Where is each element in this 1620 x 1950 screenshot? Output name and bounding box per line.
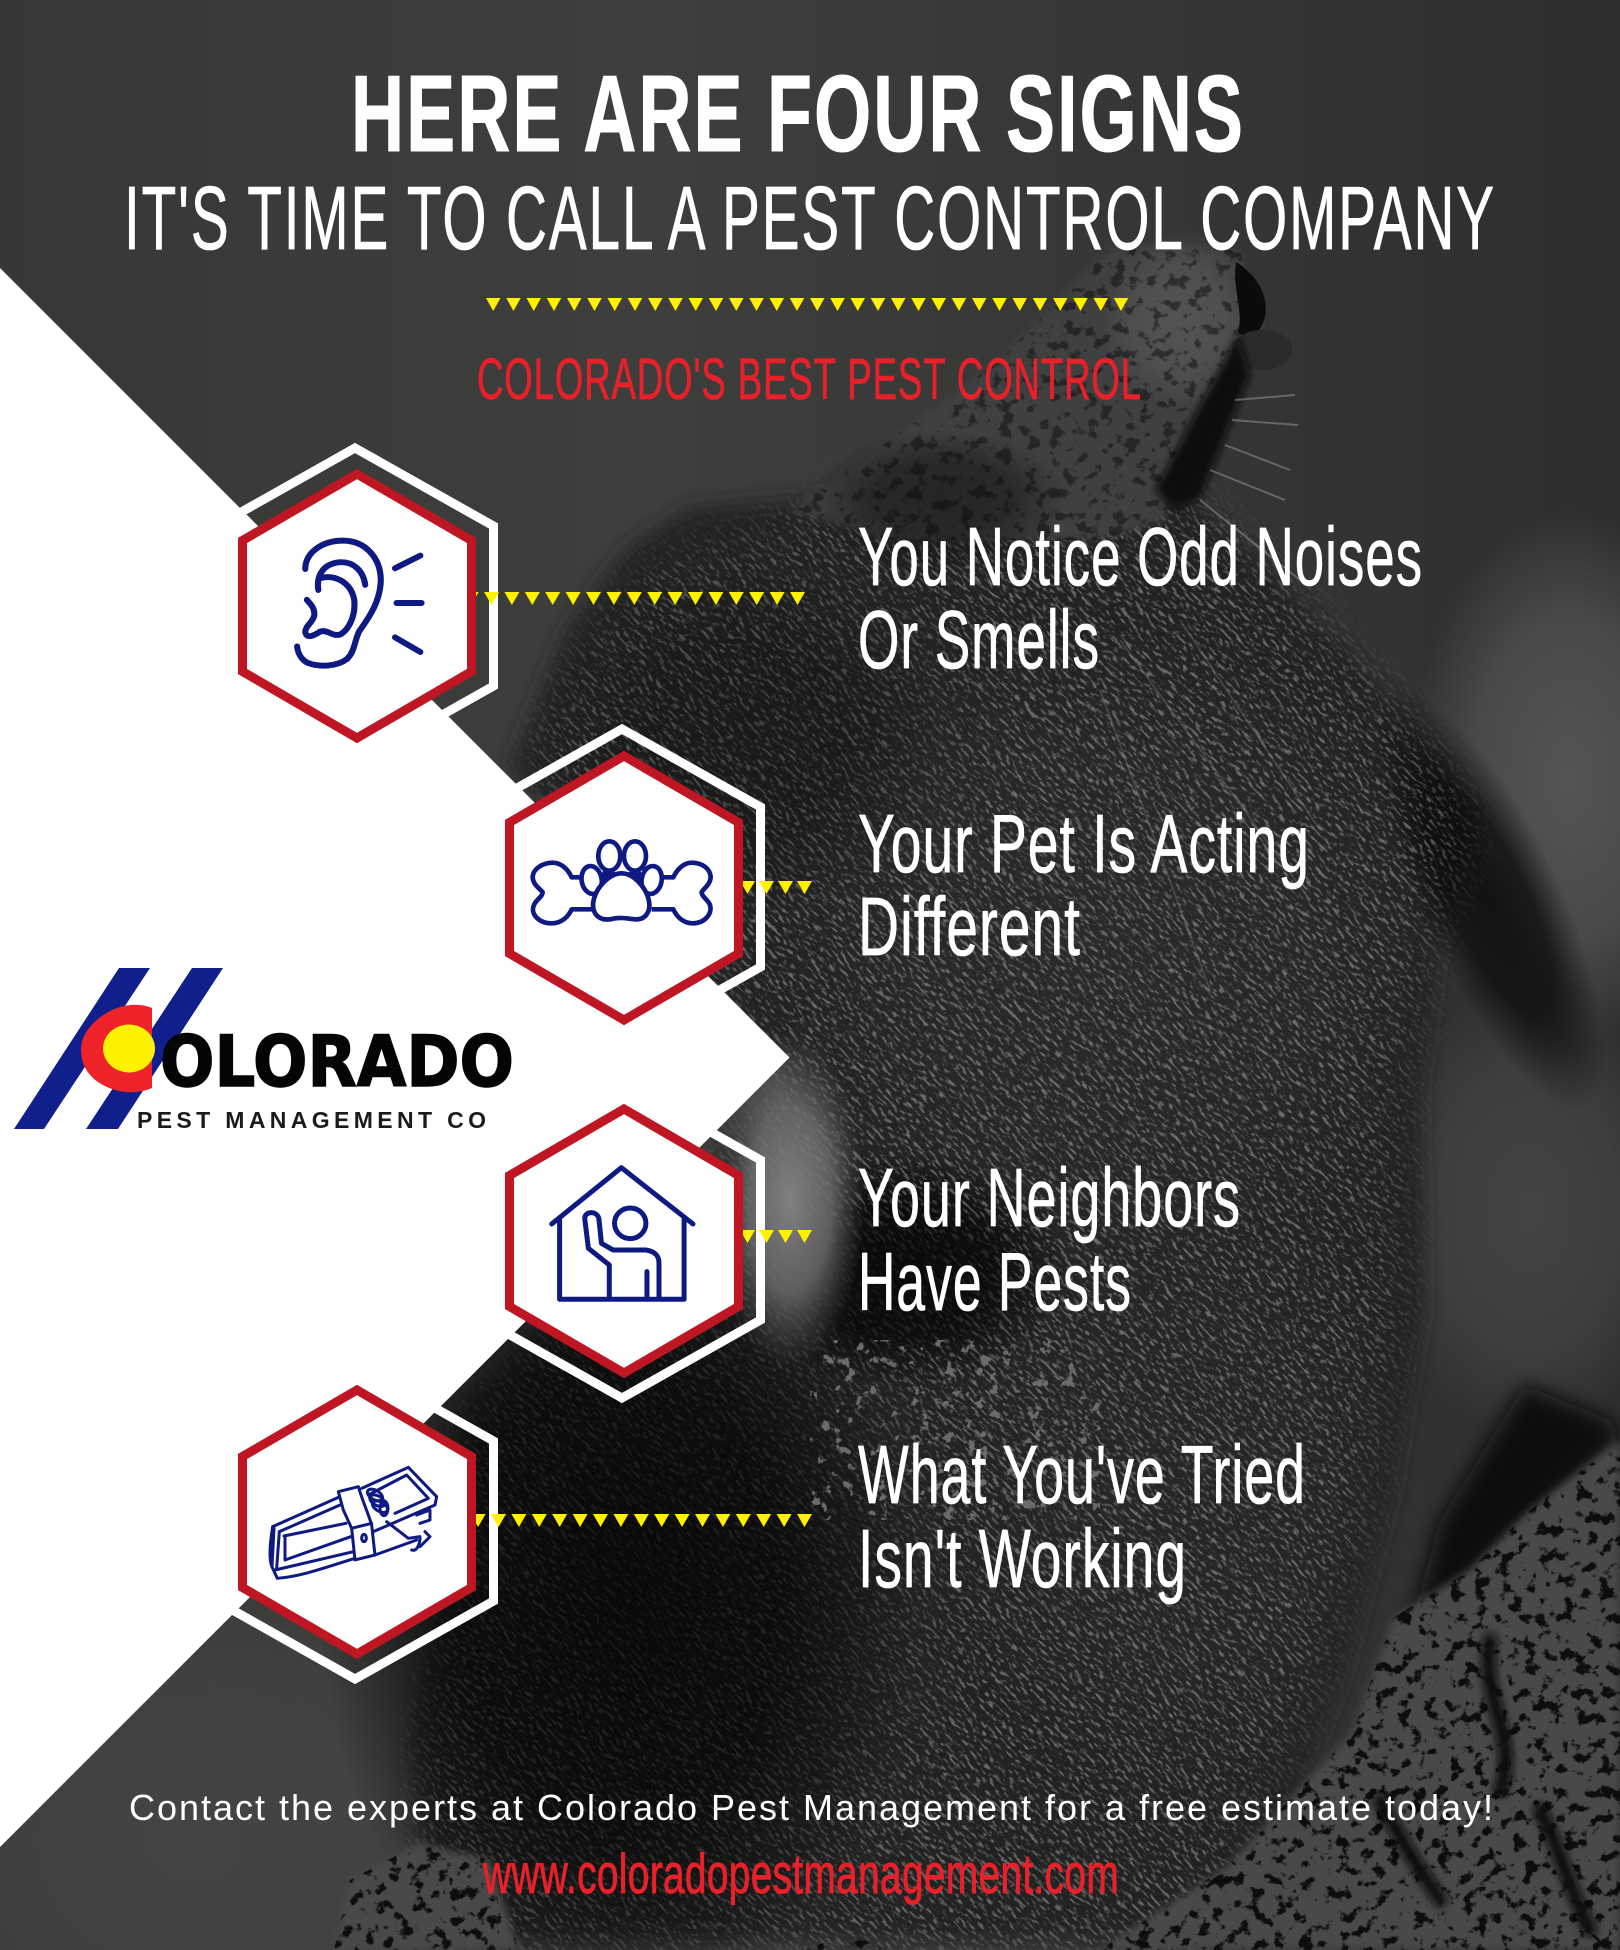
logo stripes <box>14 968 223 1129</box>
connector <box>476 1514 812 1528</box>
connector <box>740 1230 812 1244</box>
hexagon badge <box>242 1390 472 1654</box>
white diagonal panel <box>0 268 790 1847</box>
step three: neighbors <box>484 1082 812 1398</box>
yellow triangle divider <box>486 298 1133 312</box>
footer website: www.coloradopestmanagement.com <box>482 1842 1119 1905</box>
step four text: Isn't Working <box>858 1512 1187 1605</box>
hexagon badge <box>510 756 738 1020</box>
step one text: Or Smells <box>858 593 1100 686</box>
step two: pet acting different <box>484 729 812 1045</box>
step two text: Your Pet Is Acting <box>858 797 1310 890</box>
step two text <box>858 797 1310 973</box>
step four text: What You've Tried <box>858 1428 1306 1521</box>
icon: mouse trap <box>270 1467 437 1578</box>
step four: mouse trap <box>216 1363 812 1679</box>
icon: ear <box>297 541 422 666</box>
soil <box>330 1430 1620 1950</box>
step three text <box>858 1151 1241 1328</box>
paw highlight <box>715 1030 865 1370</box>
icon: paw and bone <box>533 841 711 923</box>
hexagon outer ring <box>216 1363 494 1679</box>
hexagon badge <box>510 1109 738 1373</box>
step four text <box>858 1428 1306 1605</box>
hexagon outer ring <box>484 1082 760 1398</box>
logo tagline: PEST MANAGEMENT CO <box>137 1107 486 1133</box>
logo sun <box>103 1024 155 1072</box>
company logo <box>14 968 514 1133</box>
step two text: Different <box>858 880 1081 973</box>
connector <box>476 592 805 606</box>
step one text <box>858 510 1423 686</box>
step three text: Your Neighbors <box>858 1151 1241 1244</box>
icon: person waving in house <box>552 1168 693 1299</box>
snout <box>780 230 1320 990</box>
logo wordmark: OLORADO <box>160 1021 514 1103</box>
logo colorado C <box>81 1005 152 1092</box>
dark shadow lower right <box>1407 1385 1620 1640</box>
step three text: Have Pests <box>858 1235 1132 1328</box>
connector <box>740 881 812 895</box>
footer call to action: Contact the experts at Colorado Pest Management for a free estimate today! <box>129 1787 1493 1828</box>
step one: odd noises <box>216 448 805 764</box>
hexagon outer ring <box>216 448 494 764</box>
fur texture <box>400 440 1500 1950</box>
hexagon outer ring <box>484 729 760 1045</box>
subtitle: COLORADO'S BEST PEST CONTROL <box>477 347 1142 412</box>
hexagon badge <box>242 474 472 738</box>
speckles on the fur <box>810 1340 1100 1520</box>
